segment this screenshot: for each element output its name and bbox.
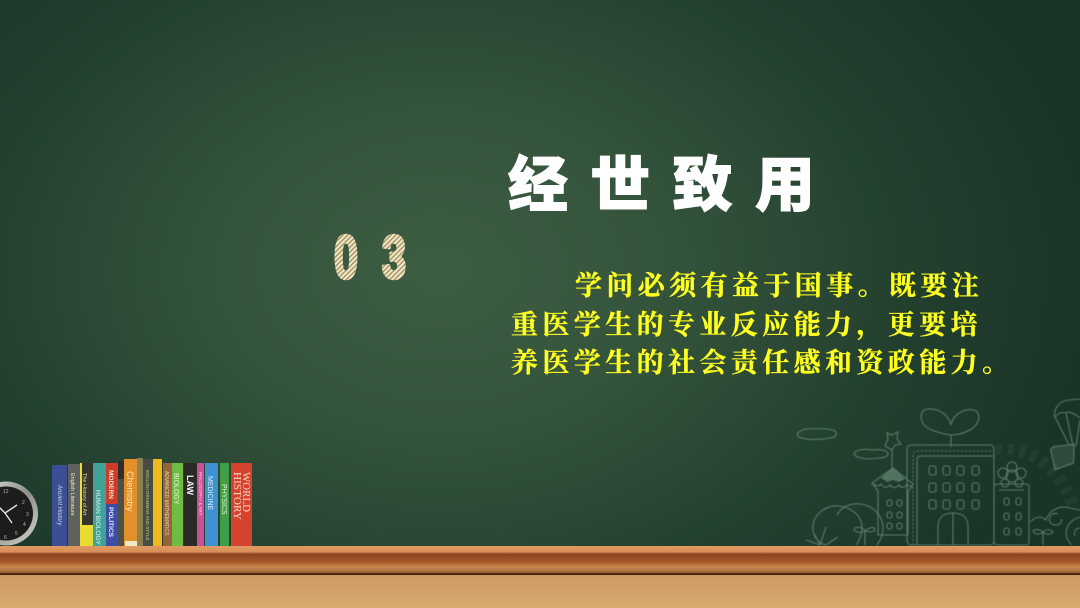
clock rim: [0, 482, 38, 546]
book: English Literature: [68, 464, 80, 546]
book: Chemistry: [124, 459, 137, 546]
book: pink: [197, 463, 204, 546]
book: Advanced Mathematics: [163, 463, 172, 546]
book: Medicine: [205, 463, 218, 546]
book: Physics: [220, 463, 229, 546]
books: [52, 458, 252, 546]
book: English Literature: English Literature: [69, 473, 75, 516]
title: 经世致用: [508, 152, 837, 219]
book: The history: The History of Art: [81, 473, 87, 516]
book: Biology: BIOLOGY: [172, 473, 179, 505]
book: Ancient History: [52, 465, 67, 546]
book: Human Biology: HUMAN BIOLOGY: [94, 490, 101, 546]
book: Law: LAW: [185, 475, 195, 496]
book: Algebra: [118, 461, 124, 546]
book: Medicine: MEDICINE: [206, 476, 213, 511]
book: Chemistry: Chemistry: [125, 471, 135, 512]
chalk doodle city: [797, 399, 1080, 545]
cloud small: [854, 449, 888, 459]
digit 3: 3: [382, 224, 406, 291]
sprout on building: [921, 409, 979, 447]
book: Modern Politics: [106, 463, 119, 546]
book: dark grey: ENGLISH GRAMMAR AND STYLE: [145, 470, 150, 541]
book: Human Biology: [93, 463, 106, 546]
line 3: 养医学生的社会责任感和资政能力。: [511, 348, 1013, 378]
section number 03: [334, 224, 406, 291]
tan floor: [0, 575, 1080, 608]
body paragraph: [511, 271, 1013, 378]
book: Advanced Mathematics: ADVANCED MATHEMATICS: [163, 471, 169, 536]
line 2: 重医学生的专业反应能力，更要培: [511, 310, 982, 341]
wooden shelf rail: [0, 546, 1080, 575]
clock: [0, 482, 38, 546]
clock numerals: 2: [22, 500, 25, 506]
pencil house: [872, 432, 913, 535]
book: World History: [231, 463, 252, 546]
clock numerals: [3, 489, 29, 541]
book: Modern Politics: POLITICS: [107, 507, 114, 538]
round tree left: [806, 506, 862, 545]
clock numerals: 6: [4, 535, 7, 541]
book: World History: WORLD: [240, 472, 251, 512]
book: dark grey: [143, 459, 153, 546]
line 1: 学问必须有益于国事。既要注: [575, 271, 983, 301]
swirl bushes right: [1030, 507, 1080, 545]
book: Modern Politics: MODERN: [107, 470, 114, 499]
pencil tip fill: [881, 468, 905, 482]
clock numerals: 3: [26, 512, 29, 518]
clock numerals: 4: [23, 522, 26, 528]
book: olive spine: [137, 458, 143, 546]
dotted arc behind buildings: [996, 448, 1074, 510]
book: Physics: PHYSICS: [220, 484, 227, 515]
book: Law: [184, 463, 197, 546]
small sprout: [854, 527, 875, 545]
clock numerals: 12: [3, 489, 9, 495]
clock numerals: 5: [15, 531, 18, 537]
book: The history: [80, 463, 93, 546]
book: yellow: [153, 459, 162, 546]
book: Ancient History: Ancient History: [56, 484, 62, 526]
book: pink: PHILOSOPHY & ART: [198, 472, 203, 516]
cloud left: [797, 429, 836, 440]
clock face: [0, 486, 33, 540]
book: World History: HISTORY: [231, 472, 242, 520]
digit 0: 0: [334, 224, 358, 291]
small building with flower: [994, 462, 1029, 545]
round tree middle: [837, 504, 883, 545]
tall building: [907, 445, 994, 545]
book: Biology: [172, 463, 183, 546]
clock hands: [0, 505, 17, 523]
parachute balloon: [1050, 399, 1080, 470]
